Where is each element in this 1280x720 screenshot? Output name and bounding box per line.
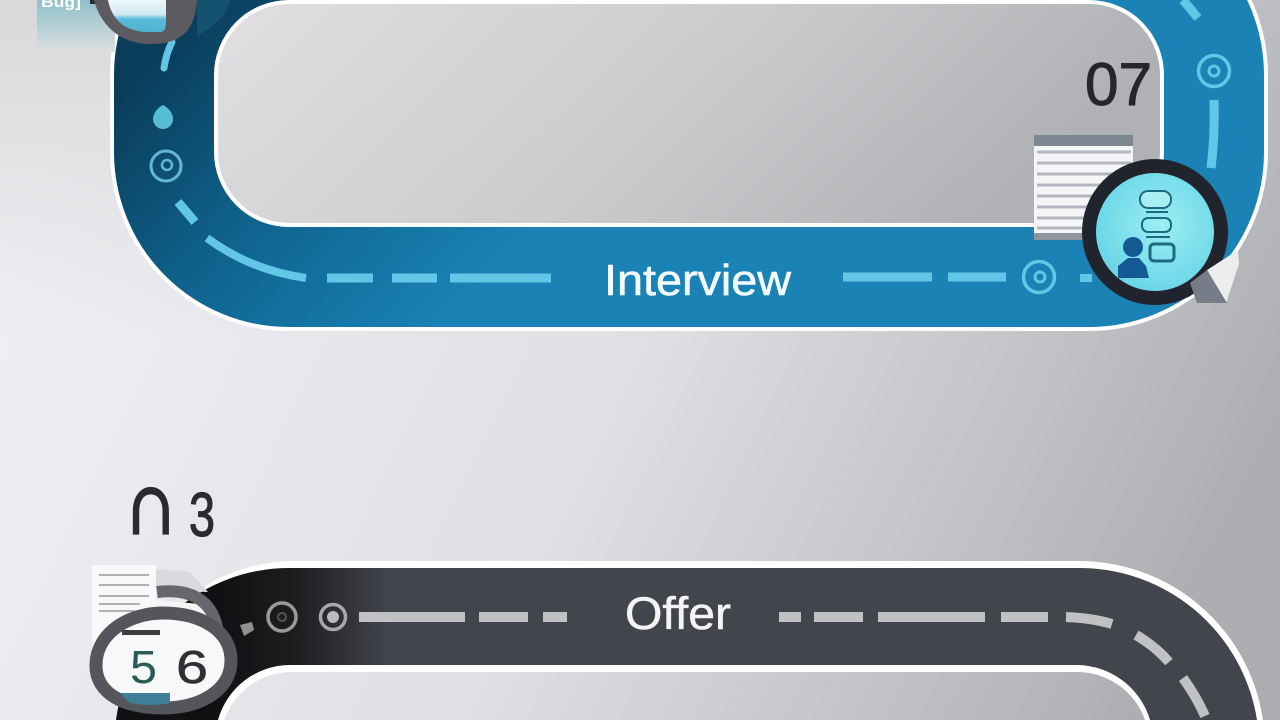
teal card [37, 0, 115, 52]
icon: ring marker two [320, 604, 346, 630]
icon: connector blob [240, 622, 254, 636]
icon: badge, step 03 [96, 613, 231, 708]
heading: interview: Interview [604, 256, 791, 305]
ring glow [197, 0, 230, 36]
badge stripe [120, 693, 170, 705]
icon: badge, top left [37, 0, 230, 52]
icon: ring marker one [268, 603, 296, 631]
road surface [116, 568, 1257, 720]
road centre dashes [164, 0, 1214, 278]
badge tab [122, 630, 160, 635]
step number 07: 07 [1085, 51, 1152, 118]
badge lens [1089, 166, 1221, 298]
digit three: 3 [189, 481, 215, 550]
step number 03 [124, 454, 215, 552]
person icon [1118, 237, 1149, 278]
icon: rear ring, step 03 [156, 591, 217, 630]
ring [94, 0, 197, 44]
panel: interview road [151, 0, 1230, 305]
road centre dashes [359, 617, 1205, 716]
background top-left shade [0, 0, 300, 340]
icon: document, step 03 [92, 565, 208, 657]
road edge [205, 561, 1263, 720]
icon: ring marker left [151, 151, 181, 181]
digit zero: ∩ [124, 454, 178, 552]
lens [108, 0, 166, 32]
icon: ring marker bottom [1024, 262, 1054, 292]
badge ring [96, 613, 231, 708]
heading: offer: Offer [625, 588, 731, 639]
icon: magnifier badge with person [1089, 166, 1239, 303]
road edge [164, 0, 1214, 277]
road inner area [215, 0, 1162, 226]
badge pointer [1190, 250, 1239, 303]
panel: offer road [116, 561, 1263, 720]
badge left digit: 5 [130, 641, 157, 693]
icon: ring marker right [1198, 56, 1230, 86]
icon: drop marker [153, 105, 173, 129]
stacked speech pills [1140, 191, 1174, 261]
card tab [90, 0, 110, 4]
road surface [164, 0, 1214, 277]
icon: document, step 07 [1034, 135, 1133, 240]
badge right digit: 6 [176, 641, 208, 693]
